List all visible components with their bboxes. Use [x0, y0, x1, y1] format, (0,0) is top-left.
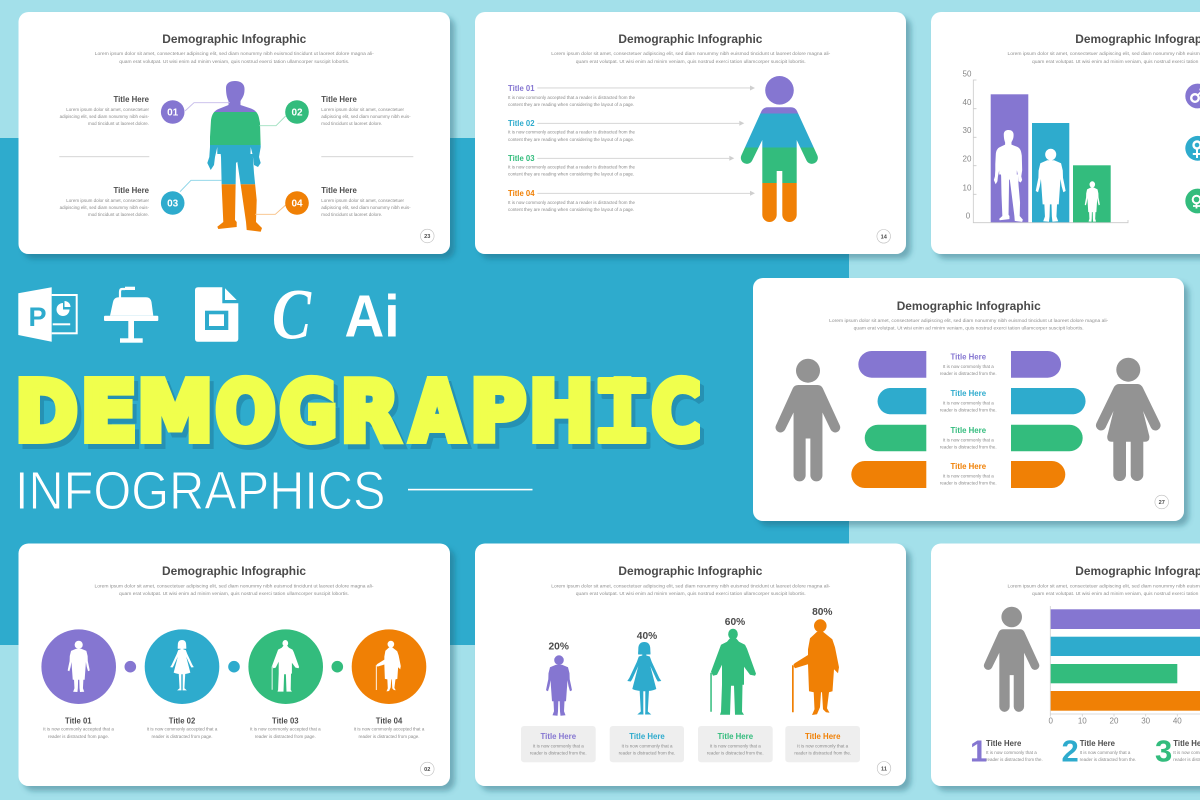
title: DEMOGRAPHIC: P	[470, 365, 526, 460]
heading: Demographic Infographic	[162, 32, 306, 46]
caption box 4	[785, 726, 860, 762]
page number	[420, 762, 434, 776]
row 2: blue bars and text: Title Here	[951, 388, 986, 398]
list item 01: Title 01	[508, 83, 535, 93]
panel: horizontal bars slide (cropped)	[931, 544, 1200, 786]
arrow 03	[537, 156, 734, 161]
text block: top left: Lorem ipsum dolor sit amet, consectetuer	[66, 107, 150, 112]
intro text: Lorem ipsum dolor sit amet, consectetuer adipiscing elit, sed diam nonummy nibh euismod tincidunt ut laoreet dolore magna ali-	[829, 318, 1109, 323]
caption 2: reader is distracted from page.	[152, 734, 212, 739]
caption box 3: reader is distracted from the.	[707, 751, 764, 756]
title: DEMOGRAPHIC: H	[529, 365, 594, 460]
connector lines	[180, 103, 286, 214]
background: blue hero band	[0, 138, 849, 645]
y axis labels: 30	[963, 126, 972, 135]
arrow 02	[537, 121, 744, 126]
legend item 1: It is now commonly that a	[986, 750, 1037, 755]
legend item 2: 2	[1062, 734, 1079, 769]
y axis labels: 10	[963, 183, 972, 192]
legend item 1: Title Here	[986, 738, 1022, 748]
icon: female symbol	[1185, 136, 1200, 161]
bar: boy	[1032, 123, 1069, 222]
intro text	[95, 51, 374, 64]
figure: boy 20%: 20%	[549, 642, 569, 652]
page number: 23	[424, 234, 430, 240]
figure: girl 40%	[627, 631, 661, 714]
caption 3: It is now commonly accepted that a	[250, 727, 321, 732]
badge 01	[161, 100, 184, 124]
list item 02: content they are reading when considering the layout of a page.	[508, 137, 634, 142]
list item 03: Title 03	[508, 153, 535, 163]
text block: top right: adipiscing elit, sed diam nonummy nibh euis-	[321, 114, 411, 119]
x axis labels: 10	[1078, 717, 1087, 726]
text block: bottom left: mod tincidunt ut laoreet dolore.	[88, 212, 149, 217]
legend item 2: reader is distracted from the.	[1080, 757, 1136, 762]
list item 01: It is now commonly accepted that a reader is distracted from the	[508, 95, 636, 100]
bar chart	[963, 69, 1128, 223]
text block: bottom right: adipiscing elit, sed diam nonummy nibh euis-	[321, 205, 411, 210]
row 4: orange bars and text: Title Here	[951, 461, 986, 471]
row 4: orange bars and text: reader is distracted from the.	[940, 480, 997, 485]
caption 3: reader is distracted from page.	[255, 734, 316, 739]
heading: Demographic Infographic	[162, 564, 306, 578]
icon: Canva: C	[272, 274, 312, 354]
intro text: Lorem ipsum dolor sit amet, consectetuer adipiscing elit, sed diam nonummy nibh euismod tincidunt ut laoreet dolore magna ali-	[94, 583, 374, 588]
row 3: green bars and text: reader is distracted from the.	[940, 444, 997, 449]
text block: bottom left: Lorem ipsum dolor sit amet, consectetuer	[66, 198, 150, 203]
text block: top right: Title Here	[321, 94, 357, 104]
text block: top left: adipiscing elit, sed diam nonummy nibh euis-	[60, 114, 150, 119]
badge 02: 02	[291, 108, 303, 119]
list item 03	[508, 153, 636, 177]
y axis labels: 0	[966, 212, 971, 221]
title: DEMOGRAPHIC: I	[611, 365, 634, 460]
caption 4: reader is distracted from page.	[358, 734, 420, 739]
intro text: Lorem ipsum dolor sit amet, consectetuer adipiscing elit, sed diam nonummy nibh euismod tincidunt ut laoreet dolore magna ali-	[95, 51, 374, 56]
page number	[877, 230, 890, 243]
row 4: orange bars and text: It is now commonly that a	[943, 473, 994, 478]
page number	[1155, 495, 1168, 509]
panel: male silhouette slide 23	[18, 12, 450, 254]
y axis labels	[963, 69, 972, 221]
caption 2: It is now commonly accepted that a	[147, 727, 218, 732]
caption 2	[147, 716, 218, 739]
caption 1: It is now commonly accepted that a	[43, 727, 114, 732]
row 1: purple bars and text: reader is distracted from the.	[940, 371, 997, 376]
intro text	[551, 583, 831, 596]
text block: top left	[60, 94, 150, 126]
legend item 1	[970, 734, 1043, 769]
badge 03	[161, 191, 184, 215]
list item 04	[508, 188, 636, 212]
panel: age percentages slide 11	[475, 544, 906, 786]
caption box 3: Title Here	[718, 731, 753, 741]
pictogram person with colour bands	[740, 76, 818, 222]
y axis labels: 20	[963, 155, 972, 164]
legend item 3	[1155, 734, 1200, 769]
caption box 2: It is now commonly that a	[622, 743, 673, 748]
row 3: green bars and text: It is now commonly that a	[943, 437, 994, 442]
heading: Demographic Infographic	[618, 32, 762, 46]
intro text	[94, 583, 374, 596]
panel: four circles slide 02	[18, 544, 450, 786]
badge 02	[285, 100, 309, 124]
text block: bottom right: Lorem ipsum dolor sit amet, consectetuer	[321, 198, 405, 203]
list item 03: content they are reading when considering the layout of a page.	[508, 172, 634, 177]
figure: old woman 80%: 80%	[812, 607, 832, 618]
badge 01: 01	[167, 108, 179, 119]
text block: bottom right	[321, 185, 411, 217]
icon: Adobe Illustrator: Ai	[344, 284, 400, 350]
legend item 1: 1	[970, 734, 987, 769]
list item 04: It is now commonly accepted that a reader is distracted from the	[508, 200, 636, 205]
title: DEMOGRAPHIC: D	[15, 365, 78, 460]
legend item 2	[1062, 734, 1136, 769]
intro text	[829, 318, 1109, 331]
list item 02	[508, 118, 636, 142]
intro text	[551, 51, 831, 64]
caption box 3: It is now commonly that a	[710, 743, 761, 748]
panel: pictogram list slide 14	[475, 12, 906, 254]
legend item 3: 3	[1155, 734, 1172, 769]
page number: 14	[881, 234, 888, 240]
legend item 1: reader is distracted from the.	[986, 757, 1043, 762]
bar: child	[1073, 165, 1111, 222]
caption box 3	[698, 726, 773, 762]
pictogram: female	[1096, 358, 1161, 481]
connector dot	[228, 661, 240, 672]
page number	[877, 762, 891, 775]
arrow 04	[537, 191, 755, 196]
intro text: quam erat volutpat. Ut wisi enim ad minim veniam, quis nostrud exerci tation ullamcorper suscipit lobortis.	[854, 326, 1084, 331]
icon: gender symbol	[1185, 189, 1200, 213]
icon: Keynote	[104, 287, 158, 343]
caption box 1	[521, 726, 596, 762]
intro text	[1008, 51, 1200, 64]
figure: old man 60%	[710, 617, 756, 715]
caption box 4: It is now commonly that a	[797, 743, 849, 748]
title: DEMOGRAPHIC: C	[652, 365, 701, 460]
icon: male symbol	[1185, 84, 1200, 108]
intro text: quam erat volutpat. Ut wisi enim ad minim veniam, quis nostrud exerci tation ullamcorper suscipit lobortis.	[576, 591, 806, 596]
caption 1	[43, 716, 114, 739]
row 2: blue bars and text	[878, 388, 1086, 414]
page number: 27	[1159, 500, 1165, 506]
bar: man	[991, 94, 1028, 222]
row 1: purple bars and text	[858, 351, 1061, 378]
row 2: blue bars and text: It is now commonly that a	[943, 401, 994, 406]
legend item 2: Title Here	[1080, 738, 1115, 748]
page number: 11	[881, 766, 887, 772]
circle 3: old man	[248, 629, 323, 704]
page number	[420, 229, 434, 243]
row 4: orange bars and text	[851, 461, 1065, 488]
row 3: green bars and text: Title Here	[951, 425, 986, 435]
title: DEMOGRAPHIC: R	[341, 365, 399, 460]
text block: bottom right: Title Here	[321, 185, 357, 195]
list item 04: content they are reading when considering the layout of a page.	[508, 207, 634, 212]
list item 04: Title 04	[508, 188, 535, 198]
list item 03: It is now commonly accepted that a reader is distracted from the	[508, 165, 636, 170]
connector dot	[332, 661, 343, 672]
x axis labels	[1048, 717, 1182, 726]
figure: girl 40%: 40%	[637, 631, 657, 642]
title: DEMOGRAPHIC	[15, 365, 701, 460]
text block: bottom right: mod tincidunt ut laoreet dolore.	[321, 212, 382, 217]
caption 3: Title 03	[272, 716, 299, 726]
badge 03: 03	[167, 199, 179, 210]
panel: opposing bars slide 27	[753, 278, 1184, 521]
text block: bottom left: adipiscing elit, sed diam nonummy nibh euis-	[60, 205, 150, 210]
caption box 2	[610, 726, 684, 762]
caption box 2: reader is distracted from the.	[619, 751, 675, 756]
subtitle: INFOGRAPHICS: INFOGRAPHICS	[15, 461, 386, 521]
x axis labels: 0	[1048, 717, 1053, 726]
badge 04: 04	[291, 199, 303, 210]
text block: top right: Lorem ipsum dolor sit amet, consectetuer	[321, 107, 405, 112]
title: DEMOGRAPHIC: M	[137, 365, 213, 460]
caption 1: reader is distracted from page.	[48, 734, 109, 739]
text block: top right: mod tincidunt ut laoreet dolore.	[321, 121, 382, 126]
row 1: purple bars and text: Title Here	[951, 352, 986, 362]
title: DEMOGRAPHIC: G	[280, 365, 337, 460]
connector dot	[124, 661, 136, 672]
text block: bottom left	[60, 185, 150, 217]
page number: 02	[424, 767, 430, 773]
intro text: quam erat volutpat. Ut wisi enim ad minim veniam, quis nostrud exerci tation ullamcorper suscipit lobortis.	[119, 591, 349, 596]
icon: Google Slides	[195, 287, 238, 342]
title: DEMOGRAPHIC: E	[81, 365, 137, 460]
x axis labels: 30	[1141, 717, 1151, 726]
intro text: Lorem ipsum dolor sit amet, consectetuer adipiscing elit, sed diam nonummy nibh euismod tincidunt ut laoreet dolore magna ali-	[551, 51, 831, 56]
man silhouette with colour bands	[207, 81, 262, 232]
circle 2: girl	[145, 629, 219, 704]
list item 02: Title 02	[508, 118, 535, 128]
figure: old woman 80%	[792, 607, 839, 715]
text block: top right	[321, 94, 411, 126]
text block: top left: Title Here	[114, 94, 149, 104]
caption 4	[354, 716, 425, 739]
title: DEMOGRAPHIC: A	[411, 365, 464, 460]
pictogram: male	[776, 359, 840, 481]
icon: PowerPoint	[18, 287, 78, 342]
title: DEMOGRAPHIC: O	[216, 365, 276, 460]
circle 4: old woman	[352, 629, 426, 704]
intro text	[1008, 583, 1200, 596]
heading: Demographic Infographic	[618, 564, 762, 578]
icon: PowerPoint: P	[28, 302, 47, 332]
list item 01: content they are reading when considering the layout of a page.	[508, 102, 634, 107]
circle 1: boy	[41, 629, 116, 704]
arrow 01	[537, 86, 755, 90]
x axis labels: 20	[1110, 717, 1119, 726]
caption box 1: reader is distracted from the.	[530, 751, 587, 756]
list item 01	[508, 83, 636, 107]
figure: old man 60%: 60%	[725, 617, 745, 628]
caption 4: It is now commonly accepted that a	[354, 727, 425, 732]
caption box 4: Title Here	[805, 731, 841, 741]
x axis labels: 40	[1173, 717, 1182, 726]
caption box 1: Title Here	[541, 731, 576, 741]
caption 2: Title 02	[169, 716, 196, 726]
row 1: purple bars and text: It is now commonly that a	[943, 364, 994, 369]
caption 4: Title 04	[376, 716, 403, 726]
intro text: Lorem ipsum dolor sit amet, consectetuer adipiscing elit, sed diam nonummy nibh euismod tincidunt ut laoreet dolore magna ali-	[551, 583, 831, 588]
caption box 1: It is now commonly that a	[533, 743, 584, 748]
caption box 2: Title Here	[629, 731, 665, 741]
y axis labels: 40	[963, 98, 972, 107]
horizontal bar chart	[1048, 606, 1200, 726]
text block: bottom left: Title Here	[114, 185, 149, 195]
figure: boy 20%	[546, 642, 572, 716]
y axis labels: 50	[963, 69, 972, 78]
row 2: blue bars and text: reader is distracted from the.	[940, 408, 997, 413]
legend item 2: It is now commonly that a	[1080, 750, 1131, 755]
caption 3	[250, 716, 321, 739]
intro text: quam erat volutpat. Ut wisi enim ad minim veniam, quis nostrud exerci tation ullamcorper suscipit lobortis.	[119, 59, 349, 64]
panel: bar chart slide (cropped)	[931, 12, 1200, 254]
intro text: quam erat volutpat. Ut wisi enim ad minim veniam, quis nostrud exerci tation ullamcorper suscipit lobortis.	[576, 59, 806, 64]
subtitle rule	[408, 489, 532, 490]
heading: Demographic Infographic	[897, 299, 1041, 313]
list item 02: It is now commonly accepted that a reader is distracted from the	[508, 130, 636, 135]
caption 1: Title 01	[65, 716, 92, 726]
row 3: green bars and text	[865, 425, 1083, 451]
text block: top left: mod tincidunt ut laoreet dolore.	[88, 121, 149, 126]
pictogram: male	[984, 607, 1039, 712]
caption box 4: reader is distracted from the.	[794, 751, 851, 756]
badge 04	[285, 191, 309, 215]
